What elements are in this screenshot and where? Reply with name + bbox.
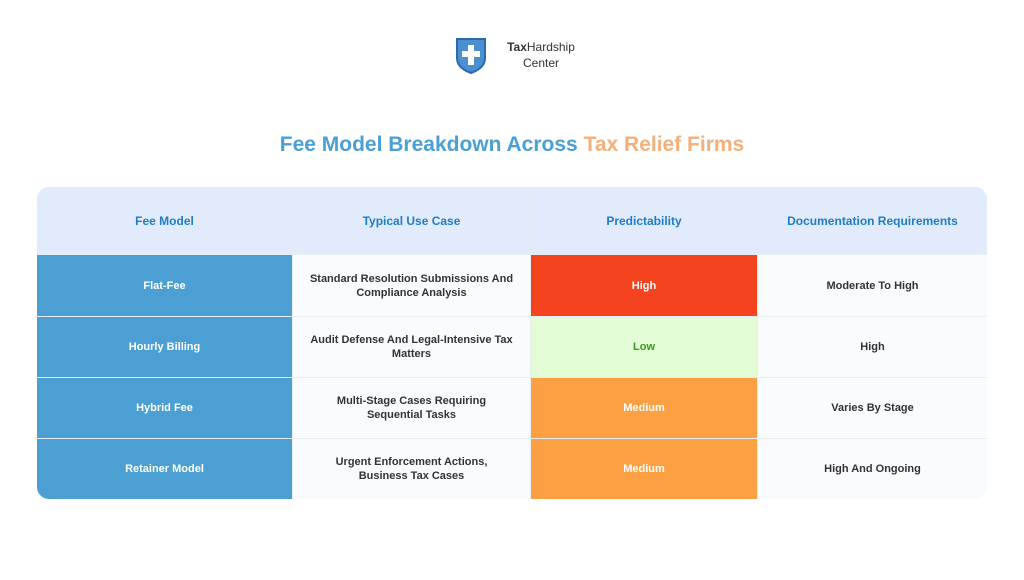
row: retainer: Urgent Enforcement Actions, <box>336 456 487 468</box>
row: hourly: Audit Defense And Legal-Intensive Tax <box>310 334 513 346</box>
row: hybrid: Sequential Tasks <box>367 409 456 421</box>
title: Tax Relief Firms <box>584 133 744 156</box>
logo text: Center <box>523 56 559 70</box>
header row: Documentation Requirements <box>787 214 958 228</box>
row: flat-fee: Moderate To High <box>826 280 919 292</box>
header row <box>37 187 987 228</box>
row: hourly: Matters <box>392 348 431 360</box>
logo text <box>507 40 575 70</box>
row: hybrid: Medium <box>623 402 665 414</box>
row: flat-fee: Compliance Analysis <box>356 286 467 298</box>
row: hybrid: Hybrid Fee <box>136 402 193 414</box>
title <box>280 133 744 156</box>
row: flat-fee: Flat-Fee <box>143 280 186 292</box>
row: flat-fee: High <box>632 280 656 292</box>
row: hourly: Low <box>633 341 655 353</box>
row: hourly <box>37 317 987 377</box>
icon: shield <box>456 38 486 74</box>
table <box>37 187 987 499</box>
row: retainer: Retainer Model <box>125 463 204 475</box>
logo text: TaxHardship <box>507 40 575 54</box>
logo <box>456 38 575 74</box>
row: flat-fee: Standard Resolution Submissions And <box>310 272 513 284</box>
row: flat-fee <box>37 255 987 316</box>
row: retainer <box>37 439 987 499</box>
row: hourly: Hourly Billing <box>129 341 200 353</box>
row: hourly: High <box>860 341 885 353</box>
header row: Typical Use Case <box>363 214 460 228</box>
row: retainer: Medium <box>623 463 665 475</box>
row: retainer: High And Ongoing <box>824 463 921 475</box>
header row: Predictability <box>606 214 682 228</box>
row: retainer: Business Tax Cases <box>359 470 464 482</box>
header row: Fee Model <box>135 214 194 228</box>
title: Fee Model Breakdown Across <box>280 133 578 156</box>
row: hybrid: Varies By Stage <box>831 402 914 414</box>
row: hybrid: Multi-Stage Cases Requiring <box>337 395 486 407</box>
row: hybrid <box>37 378 987 438</box>
